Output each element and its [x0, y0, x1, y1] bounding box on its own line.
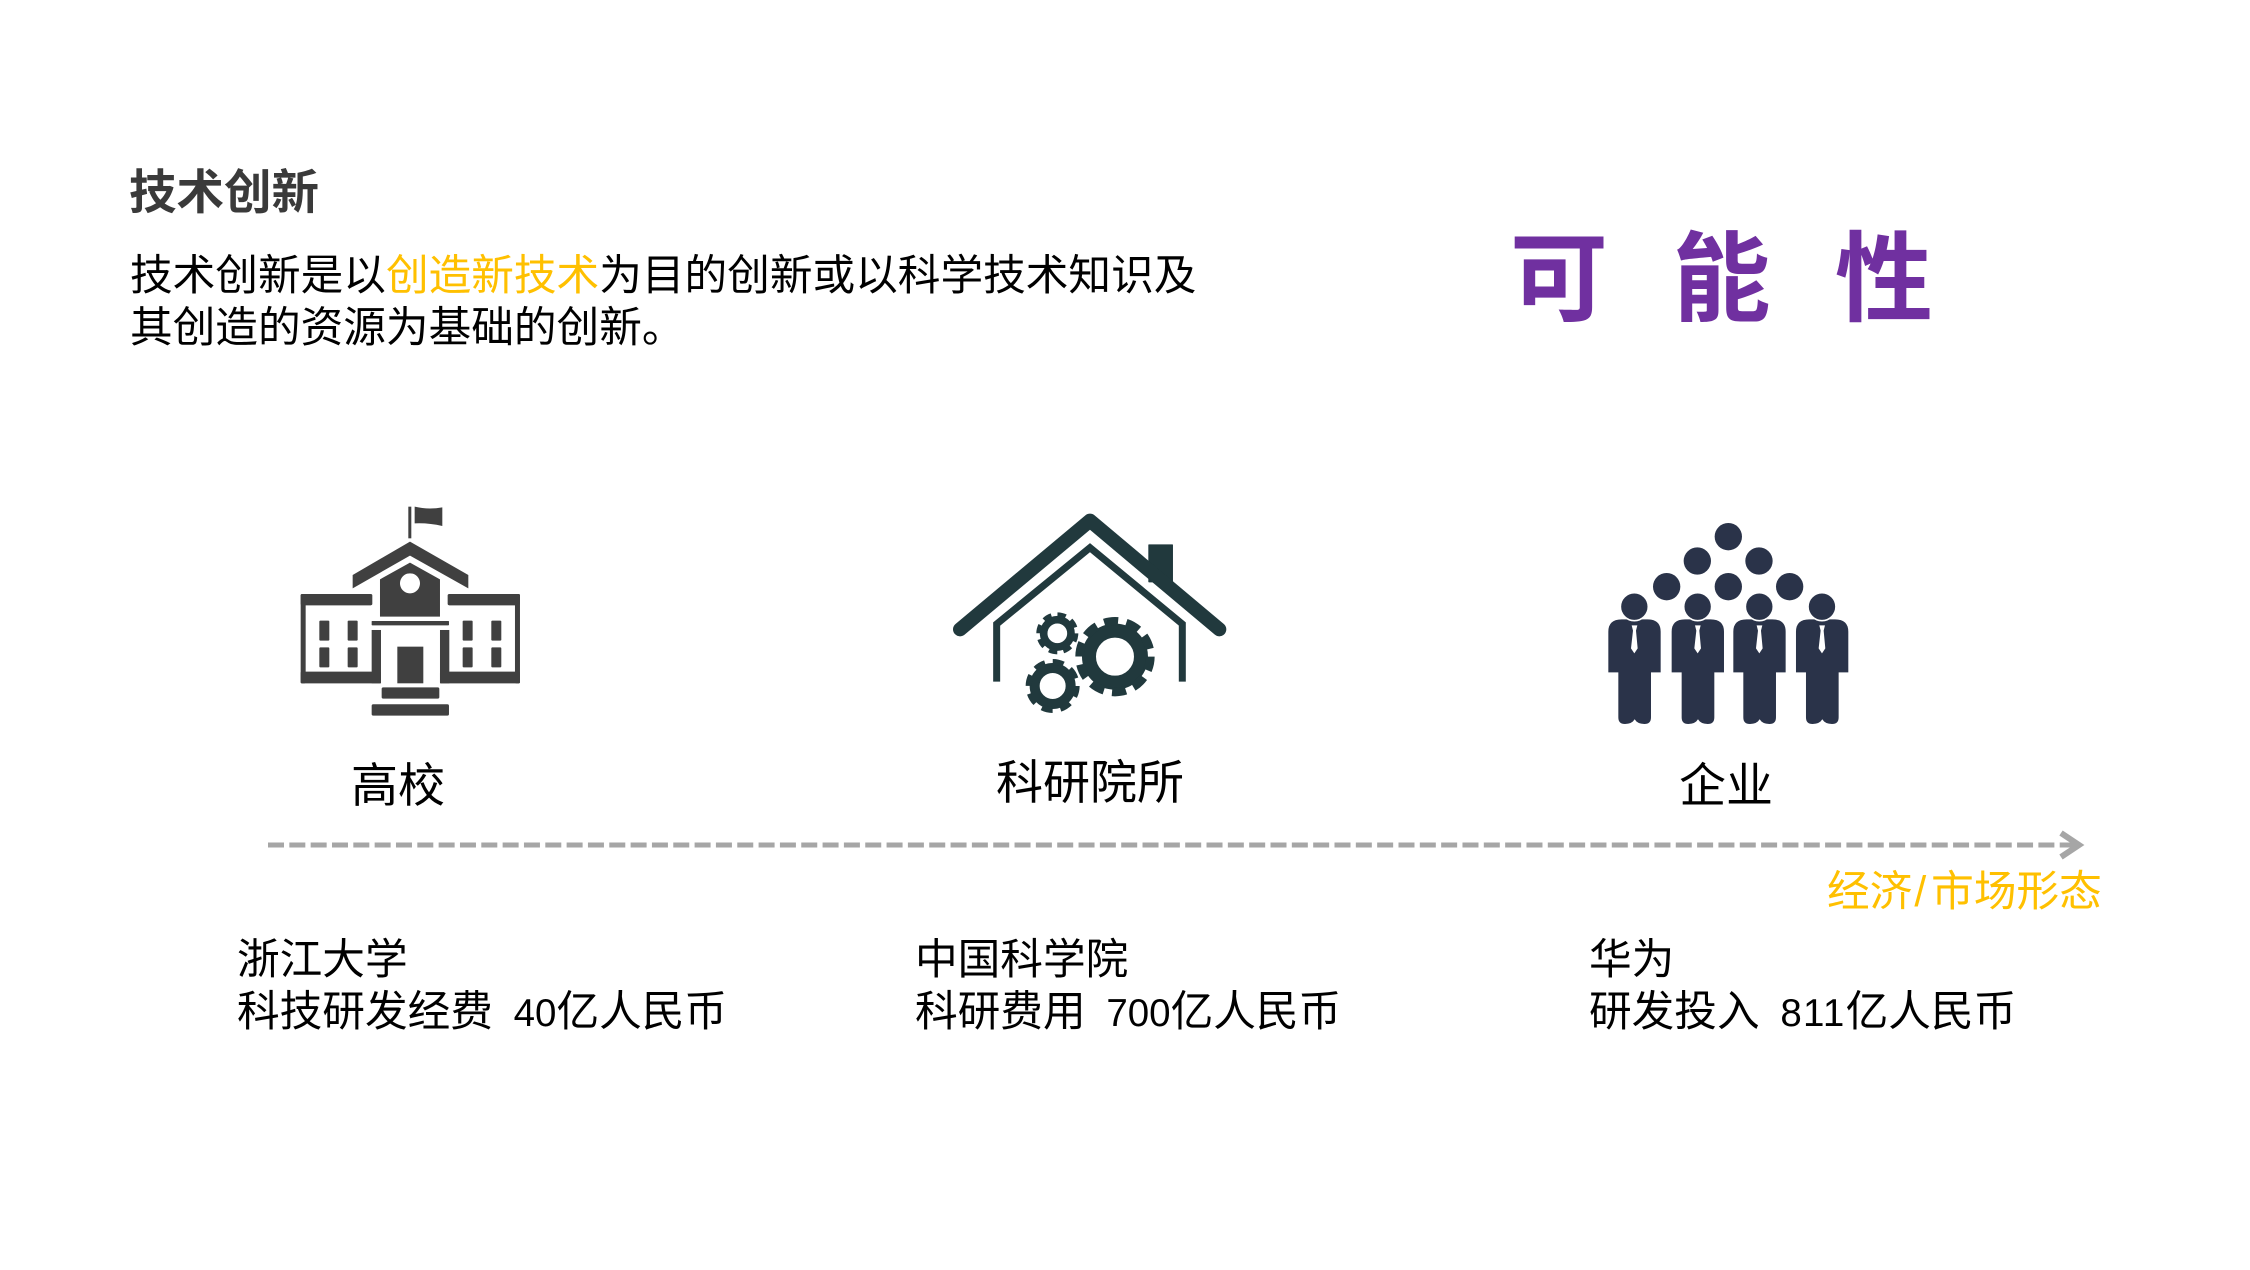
text block: Zhejiang University: 浙江大学 科技研发经费 40亿人民币: [237, 936, 727, 1036]
text block: Chinese Academy of Sciences: 中国科学院 科研费用 700亿人民币: [915, 936, 1341, 1036]
arrow: dashed axis: [268, 833, 2079, 857]
icon: group of business people: [1608, 523, 1848, 724]
icon: house with gears: [960, 521, 1219, 710]
label: research institutes: 科研院所: [996, 756, 1184, 809]
label: universities: 高校: [351, 759, 445, 812]
title: possibility: 可能性: [1510, 224, 1998, 334]
axis label: economic and market form: 经济/市场形态: [1827, 868, 2102, 916]
heading: technology innovation: 技术创新: [129, 167, 319, 220]
label: enterprises: 企业: [1679, 759, 1773, 812]
text block: Huawei: 华为 研发投入 811亿人民币: [1589, 936, 2016, 1036]
text block: definition: 技术创新是以创造新技术为目的创新或以科学技术知识及 其创造的资源为基础的创新。: [130, 252, 1196, 352]
icon: university building: [301, 507, 520, 716]
